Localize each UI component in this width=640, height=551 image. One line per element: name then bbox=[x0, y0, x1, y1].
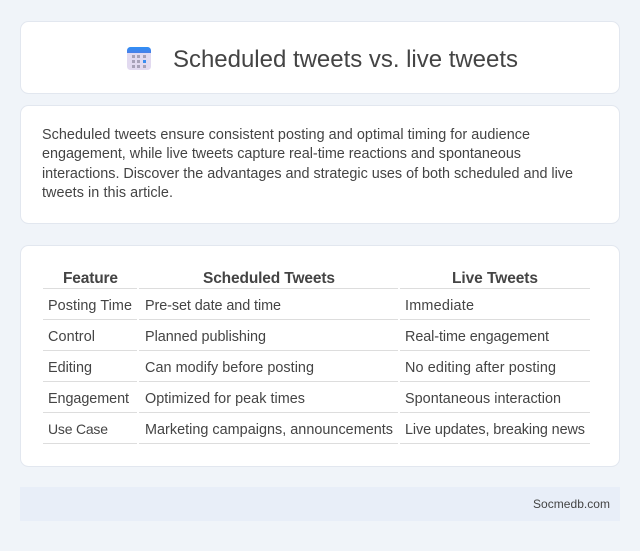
table row: engagement: Engagement bbox=[48, 391, 129, 407]
table row: use case: Marketing campaigns, announcements bbox=[145, 422, 393, 438]
table row: editing: Editing bbox=[48, 360, 92, 376]
footer source text: Socmedb.com bbox=[533, 497, 610, 511]
table header row: Live Tweets bbox=[452, 270, 538, 287]
text block: introduction paragraph: interactions. Discover the advantages and strategic uses of both scheduled and live bbox=[42, 166, 573, 182]
table row: use case bbox=[48, 421, 585, 438]
table row: control: Planned publishing bbox=[145, 329, 266, 345]
table header row bbox=[63, 270, 538, 287]
table row: engagement bbox=[48, 391, 561, 407]
table row: control: Real-time engagement bbox=[405, 329, 549, 345]
table header row: Feature bbox=[63, 270, 118, 287]
panel: introduction bbox=[20, 106, 620, 224]
text block: introduction paragraph: tweets in this article. bbox=[42, 185, 173, 201]
footer bar bbox=[20, 487, 620, 521]
table row: use case: Live updates, breaking news bbox=[405, 422, 585, 438]
icon: calendar bbox=[127, 47, 151, 70]
panel: title header bbox=[20, 22, 620, 94]
text block: introduction paragraph: engagement, while live tweets capture real-time reactions and spontaneous bbox=[42, 146, 521, 162]
table row: control: Control bbox=[48, 329, 95, 345]
text block: introduction paragraph: Scheduled tweets ensure consistent posting and optimal timing for audience bbox=[42, 127, 530, 143]
table row: control bbox=[48, 329, 549, 345]
table row: posting time: Immediate bbox=[405, 298, 474, 314]
table row: editing: Can modify before posting bbox=[145, 360, 314, 376]
text block: introduction paragraph bbox=[42, 127, 573, 201]
table row: use case: Use Case bbox=[48, 421, 108, 437]
table row: editing bbox=[48, 360, 556, 376]
table row: posting time bbox=[48, 298, 474, 314]
table row: posting time: Posting Time bbox=[48, 298, 132, 314]
table row: engagement: Optimized for peak times bbox=[145, 391, 305, 407]
table row: editing: No editing after posting bbox=[405, 360, 556, 376]
title: Scheduled tweets vs. live tweets bbox=[173, 46, 518, 73]
table row: engagement: Spontaneous interaction bbox=[405, 391, 561, 407]
table header row: Scheduled Tweets bbox=[203, 270, 335, 287]
panel: comparison table bbox=[20, 246, 620, 466]
table row: posting time: Pre-set date and time bbox=[145, 298, 281, 314]
